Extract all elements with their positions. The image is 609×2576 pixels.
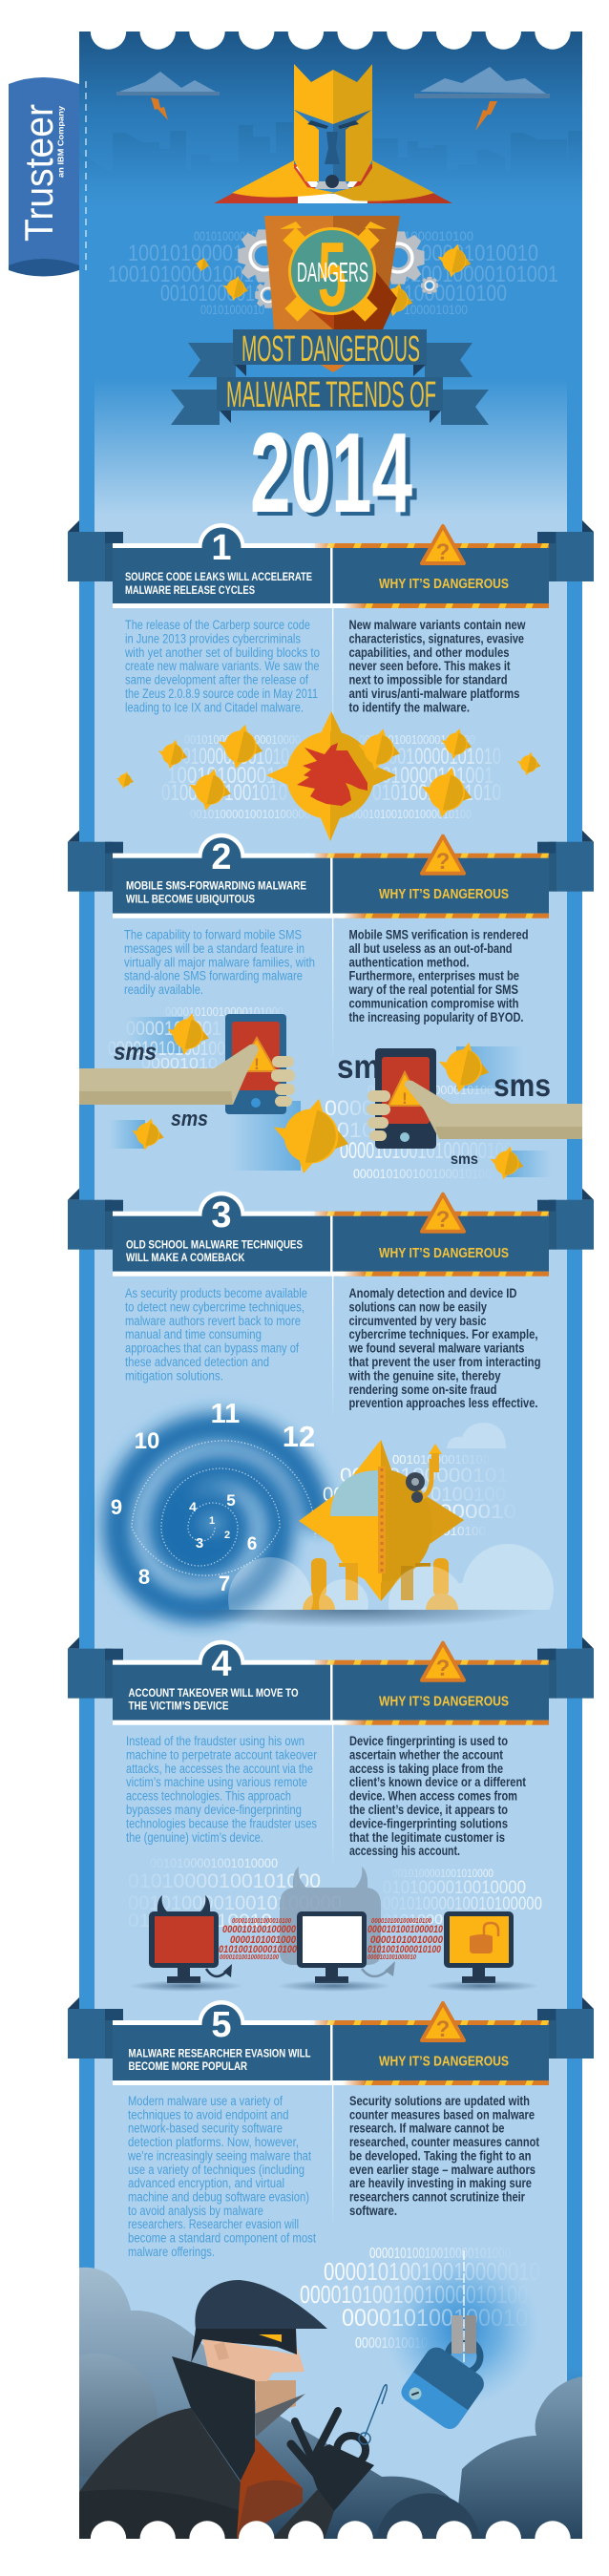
section 5 body right: Security solutions are updated with xyxy=(349,2094,530,2108)
section 3 body left: manual and time consuming xyxy=(125,1327,262,1341)
section 1 binary background: 0000101001001000010100 xyxy=(346,807,472,821)
storm clouds and lightning xyxy=(116,67,550,131)
red binary stream right: 0000101001000010 xyxy=(368,1924,444,1935)
hero binary text: 1000010100 xyxy=(404,281,507,306)
section 5 body left: we’re increasingly seeing malware that xyxy=(127,2148,311,2163)
section 5 why dangerous heading: WHY IT’S DANGEROUS xyxy=(379,2055,509,2070)
bottom perforated edge xyxy=(57,2521,609,2576)
section 2 binary background: 0000101001 xyxy=(126,1018,221,1040)
section 2 body left: stand-alone SMS forwarding malware xyxy=(124,969,303,983)
section 4 body left: machine to perpetrate account takeover xyxy=(126,1747,317,1762)
red binary stream right: 0000101001000010100 xyxy=(371,1918,431,1925)
section 4 body left xyxy=(126,1734,317,1845)
section 3 body left: approaches that can bypass many of xyxy=(125,1341,299,1356)
red binary stream left: 0000101001000010100 xyxy=(232,1918,291,1925)
section 2 body right: communication compromise with xyxy=(349,997,519,1010)
shield badge: 5 dangers: DANGERS xyxy=(297,258,368,288)
section 1 body left: the Zeus 2.0.8.9 source code in May 2011 xyxy=(125,686,318,701)
section 1 binary background: 00001010010000100100 xyxy=(359,732,475,747)
section 3 body right: cybercrime techniques. For example, xyxy=(349,1327,538,1341)
section 4 binary background: 00101000010010100000 xyxy=(383,1894,542,1914)
section 3 binary background xyxy=(323,1452,516,1538)
section 4 body left: attacks, he accesses the account via the xyxy=(126,1762,313,1776)
section 1 binary background: 00101000010010100000 xyxy=(190,807,310,821)
section 4 body left: technologies because the fraudster uses xyxy=(126,1816,317,1830)
title ribbons xyxy=(171,329,489,425)
section 5: researcher evasion xyxy=(33,1997,594,2539)
hero binary text: 100101000010010 xyxy=(108,262,264,287)
spiral clock: 9 xyxy=(111,1495,122,1519)
section 5 binary stream xyxy=(300,2246,540,2352)
spiral clock: 10 xyxy=(135,1428,159,1454)
shield badge: 5 dangers: 5 xyxy=(318,223,346,326)
section 3: old school malware xyxy=(68,1189,594,1642)
section 4 body right: device. When access comes from xyxy=(349,1789,517,1804)
section 5 body right: be developed. Taking the fight to an xyxy=(349,2148,531,2163)
section 1 body right: New malware variants contain new xyxy=(349,618,526,632)
monitor floor shadows xyxy=(129,1980,539,1992)
section 2 body right: Furthermore, enterprises must be xyxy=(349,969,519,983)
red binary stream left xyxy=(219,1918,298,1961)
section 5 body left xyxy=(127,2094,316,2259)
section 5 body left: machine and debug software evasion) xyxy=(128,2189,309,2204)
section 1 body left: in June 2013 provides cybercriminals xyxy=(125,631,301,645)
section 2 binary background: 00001010010000101000 xyxy=(165,1004,284,1019)
section 2 binary background: 0000101001000010100 xyxy=(368,1083,494,1097)
section 5 body right: research. If malware cannot be xyxy=(349,2122,505,2136)
gloved hand with lock pick xyxy=(291,2385,387,2511)
section 4 binary background: 0010100001001010000 xyxy=(150,1855,278,1870)
right phone with hand xyxy=(367,1048,582,1149)
section 3 ground shadow xyxy=(204,1610,521,1627)
section 5 binary stream: 00001010010010000010 xyxy=(324,2257,540,2286)
section 2 body left: virtually all major malware families, with xyxy=(124,955,315,969)
section 3 binary background: 00010100010100100 xyxy=(323,1484,506,1506)
section 1 body left: with yet another set of building blocks to xyxy=(124,645,320,660)
section 3 body left: malware authors revert back to more xyxy=(125,1314,301,1328)
hero binary text xyxy=(108,228,558,317)
red binary stream right: 0101001000010100 xyxy=(368,1944,442,1955)
section 1 horse malware emblem xyxy=(266,711,396,841)
spiral clock: 4 xyxy=(189,1499,197,1514)
spiral clock: 7 xyxy=(219,1572,230,1595)
monitor: victim white xyxy=(297,1911,395,1983)
spiral clock: 2 xyxy=(224,1530,230,1541)
section 3 binary background: 00010100000101 xyxy=(340,1465,509,1487)
section 3 heading: WILL MAKE A COMEBACK xyxy=(126,1253,245,1264)
red binary stream left: 0000101001000 xyxy=(230,1934,297,1946)
section 5 body right: researchers cannot scrutinize their xyxy=(349,2189,526,2204)
section 3 number: 3 xyxy=(211,1195,232,1235)
section 3 body right: rendering some on-site fraud xyxy=(349,1383,496,1397)
section 5 binary stream: 00001010010 xyxy=(355,2335,428,2352)
hero: golden masked figure xyxy=(214,64,452,203)
section 4 body right: Device fingerprinting is used to xyxy=(349,1734,508,1748)
section 1 binary background: 100101000010 xyxy=(167,763,286,789)
section 1 binary background: 0100001001010 xyxy=(182,744,289,770)
hero binary text: 0100001010010 xyxy=(400,241,538,266)
section 4 body left: access technologies. This approach xyxy=(126,1789,291,1804)
lock glow xyxy=(384,2250,540,2407)
section 5 binary stream: 000010100100010 xyxy=(342,2305,528,2332)
section 3 body right: with the genuine site, thereby xyxy=(348,1368,501,1383)
section 5 body right: even earlier stage – malware authors xyxy=(349,2163,536,2177)
section 1 heading: MALWARE RELEASE CYCLES xyxy=(125,585,255,597)
section 1 binary background xyxy=(161,732,501,821)
section 2 number: 2 xyxy=(211,837,232,877)
section 3 heading: OLD SCHOOL MALWARE TECHNIQUES xyxy=(126,1240,303,1252)
hero binary text: 1000010100 xyxy=(404,228,473,243)
monitor: infected red xyxy=(149,1895,232,1983)
spiral clock: 12 xyxy=(283,1420,315,1453)
section 1 heading: SOURCE CODE LEAKS WILL ACCELERATE xyxy=(125,572,312,583)
section 2 binary lower: 0000 xyxy=(325,1096,374,1120)
section 5 body left: become a standard component of most xyxy=(128,2230,316,2246)
section 3 body left: mitigation solutions. xyxy=(125,1368,223,1383)
section 3 heading xyxy=(126,1240,303,1264)
small cloud xyxy=(447,1423,506,1448)
section 5 body left: researchers. Researcher evasion will xyxy=(128,2217,299,2231)
red binary stream left: 000010100100000 xyxy=(222,1924,297,1935)
spiral clock: 5 xyxy=(226,1491,236,1510)
section 1 body left: create new malware variants. We saw the xyxy=(125,659,319,673)
title year 2014: 2014 xyxy=(250,410,412,537)
shield badge: 5 dangers xyxy=(264,216,400,329)
section 1 body right: anti virus/anti-malware platforms xyxy=(349,686,519,701)
section 2 heading: MOBILE SMS-FORWARDING MALWARE xyxy=(126,881,306,893)
section 1 heading xyxy=(125,572,312,597)
section 4 why dangerous heading: WHY IT’S DANGEROUS xyxy=(379,1695,509,1710)
section 3 body right xyxy=(348,1286,540,1410)
section 3 body right: circumvented by very basic xyxy=(349,1314,487,1328)
section 3 binary background: 000010 xyxy=(439,1501,516,1523)
section 3 body right: prevention approaches less effective. xyxy=(349,1396,538,1410)
section 2 binary lower: 0010 xyxy=(325,1118,374,1142)
section 3 body left xyxy=(125,1286,307,1383)
section 4 binary background: 0101000010010 xyxy=(128,1911,272,1932)
section 4 body left: victim’s machine using various remote xyxy=(126,1775,307,1789)
section 3 binary background: 00101000010100 xyxy=(392,1452,490,1467)
section 4 binary background: 01010000100101000 xyxy=(128,1870,321,1892)
title ribbons: MOST DANGEROUS xyxy=(242,329,420,370)
section 1: source code leaks xyxy=(68,520,594,841)
left phone with hand: ! xyxy=(254,1055,260,1073)
section 4 warning icon: ? xyxy=(436,1656,450,1681)
red binary stream right: 00001010010000 xyxy=(370,1934,444,1946)
section 2 body left: readily available. xyxy=(124,982,203,997)
section 4 body right: access is taking place from the xyxy=(349,1762,503,1776)
ghost devil behind middle monitor xyxy=(280,1867,381,1965)
section 4 body right xyxy=(349,1734,526,1858)
top perforated edge xyxy=(76,0,592,50)
sms labels left: sms xyxy=(171,1107,208,1130)
section 3 body left: to detect new cybercrime techniques, xyxy=(125,1299,304,1314)
section 1 body right: never seen before. This makes it xyxy=(349,659,511,673)
section 2 body right: Mobile SMS verification is rendered xyxy=(349,928,529,941)
red binary stream left: 0101001000010100 xyxy=(219,1944,298,1955)
hero binary text: 010010000101001 xyxy=(400,262,558,287)
section 3 body right: Anomaly detection and device ID xyxy=(349,1286,517,1300)
left phone with hand xyxy=(79,1014,295,1114)
logo tab: Trusteer: Trusteer xyxy=(16,104,61,242)
spiral clock: 11 xyxy=(211,1399,240,1429)
section 4 heading xyxy=(128,1688,299,1713)
section 5 binary stream: 00001010010010000101000 xyxy=(369,2246,511,2262)
section 5 binary stream: 0000101001001000010100 xyxy=(300,2280,528,2309)
title year 2014: 2014 xyxy=(255,413,417,540)
section 2 binary lower: 000010100100100010100 xyxy=(353,1166,492,1181)
section 4 heading: ACCOUNT TAKEOVER WILL MOVE TO xyxy=(128,1688,299,1700)
section 1 body right: characteristics, signatures, evasive xyxy=(349,631,524,645)
section 5 warning icon: ? xyxy=(436,2016,450,2042)
hero binary text: 1000010100 xyxy=(404,302,468,317)
section 5 body right: software. xyxy=(349,2204,397,2218)
section 5 number: 5 xyxy=(211,2005,232,2045)
section 4 body right: device-fingerprinting solutions xyxy=(349,1816,508,1830)
section 3 body right: that prevent the user from interacting xyxy=(349,1355,540,1369)
sms labels right: sms xyxy=(494,1067,551,1103)
section 3 why dangerous heading: WHY IT’S DANGEROUS xyxy=(379,1246,509,1261)
section 2 body right: all but useless as an out-of-band xyxy=(349,941,512,956)
section 4 number: 4 xyxy=(211,1644,232,1684)
gears and sparks xyxy=(196,229,471,316)
spiral clock xyxy=(111,1399,318,1609)
padlock being cut xyxy=(397,2250,489,2433)
section 1 number: 1 xyxy=(211,528,232,568)
section 1 body right: next to impossible for standard xyxy=(349,673,508,687)
section 4 binary background: 00101000010010100000 xyxy=(128,1892,342,1914)
spiral clock: 3 xyxy=(196,1535,203,1552)
section 3 body left: As security products become available xyxy=(125,1286,307,1300)
red binary stream left: 0000101001000010100 xyxy=(220,1954,279,1961)
section 4 body right: the client’s device, it appears to xyxy=(349,1803,508,1817)
hero binary text: 00101000010 xyxy=(160,281,264,306)
section 4 body right: accessing his account. xyxy=(349,1844,460,1858)
section 2 binary background: 00001010 xyxy=(141,1056,218,1072)
masked burglar figure xyxy=(79,2280,334,2539)
section 2 body right: the increasing popularity of BYOD. xyxy=(349,1010,523,1024)
section 1 body left: same development after the release of xyxy=(125,673,308,687)
red binary stream right xyxy=(368,1918,444,1961)
section 3 warning icon: ? xyxy=(436,1207,450,1233)
section 5 body right: are heavily investing in making sure xyxy=(349,2176,532,2190)
section 2 binary background: 00001010100100 xyxy=(108,1038,225,1060)
section 1 warning icon: ? xyxy=(436,539,450,565)
section 4 body left: the (genuine) victim’s device. xyxy=(126,1830,263,1845)
section 1 binary background: 01010010001010 xyxy=(372,780,501,806)
section 5 heading: MALWARE RESEARCHER EVASION WILL xyxy=(128,2049,311,2060)
section 4: account takeover xyxy=(68,1637,594,1992)
background storm clouds xyxy=(33,2268,582,2539)
section 5 body right xyxy=(349,2094,539,2218)
section 4 body right: client’s known device or a different xyxy=(349,1775,526,1789)
hero binary text: 1001010000100 xyxy=(128,241,264,266)
section 5 body right: researched, counter measures cannot xyxy=(349,2135,539,2149)
section 2 body left: messages will be a standard feature in xyxy=(124,941,304,956)
section 3 binary background: 010100 xyxy=(443,1524,486,1538)
section 4 binary background: 0101000010010000 xyxy=(383,1878,526,1898)
section 2 binary lower: 00001010010100000100 xyxy=(340,1138,513,1164)
section 4 body left: bypasses many device-fingerprinting xyxy=(126,1803,302,1817)
section 2 why dangerous heading: WHY IT’S DANGEROUS xyxy=(379,887,509,902)
section 1 binary background: 01001001001010 xyxy=(161,780,287,806)
section 2 warning icon: ? xyxy=(436,849,450,875)
section 1 body right xyxy=(349,618,526,714)
section 4 heading: THE VICTIM’S DEVICE xyxy=(128,1701,229,1713)
section 4 body left: Instead of the fraudster using his own xyxy=(126,1734,304,1748)
section 1 binary background: 0010000101001 xyxy=(372,763,494,789)
section 3 body right: solutions can now be easily xyxy=(349,1299,487,1314)
section 5 body left: detection platforms. Now, however, xyxy=(128,2135,299,2149)
section 1 why dangerous heading: WHY IT’S DANGEROUS xyxy=(379,577,509,592)
title year 2014 xyxy=(250,410,417,540)
rocket xyxy=(299,1440,464,1610)
clouds at rocket base xyxy=(228,1544,554,1610)
section 5 body left: use a variety of techniques (including xyxy=(128,2163,304,2177)
section 1 body left: The release of the Carberp source code xyxy=(125,618,310,632)
hero binary text: 00101000010 xyxy=(194,228,257,243)
city skyline xyxy=(79,122,582,186)
spiral clock: 6 xyxy=(247,1534,257,1554)
section 1 body left: leading to Ice IX and Citadel malware. xyxy=(125,700,304,714)
hero binary text: 00101000010 xyxy=(200,302,264,317)
section 5 body left: to avoid analysis by malware xyxy=(128,2204,263,2218)
section 4 body right: that the legitimate customer is xyxy=(349,1830,505,1845)
section 5 body left: techniques to avoid endpoint and xyxy=(128,2107,288,2122)
section 2 body right: wary of the real potential for SMS xyxy=(348,982,518,997)
section 5 heading xyxy=(128,2049,311,2073)
section 4 binary background xyxy=(128,1855,542,1932)
section 2 virus sparks xyxy=(132,1013,523,1179)
red binary stream right: 0000101001000010 xyxy=(368,1954,416,1961)
sms labels right: sms xyxy=(337,1048,397,1086)
section 1 virus sparks xyxy=(116,725,540,817)
section 5 body left: network-based security software xyxy=(128,2122,283,2136)
section 2: mobile sms forwarding xyxy=(68,831,594,1181)
section 3 body right: we found several malware variants xyxy=(348,1341,525,1356)
section 2 binary background xyxy=(108,1004,494,1097)
sms labels left: sms xyxy=(114,1039,157,1066)
section 1 binary background: 00101000010100010000 xyxy=(184,732,301,747)
spiral clock: 8 xyxy=(138,1565,150,1589)
logo tab: Trusteer: an IBM Company xyxy=(57,105,65,178)
section 5 heading: BECOME MORE POPULAR xyxy=(128,2061,248,2073)
section 2 body right: authentication method. xyxy=(349,955,470,969)
logo tab: Trusteer xyxy=(9,77,86,277)
section 5 body right: counter measures based on malware xyxy=(349,2107,535,2122)
section 1 binary background: 0010000101010 xyxy=(388,744,501,770)
sms labels right xyxy=(337,1048,551,1168)
section 3 body left: these advanced detection and xyxy=(125,1355,269,1369)
section 4 binary background: 0101000 xyxy=(383,1911,443,1928)
monitor: open lock yellow xyxy=(444,1911,514,1983)
section 2 binary lower xyxy=(325,1096,513,1181)
section 1 body left xyxy=(124,618,320,714)
section 4 body right: ascertain whether the account xyxy=(349,1747,503,1762)
spiral clock: 1 xyxy=(209,1515,215,1527)
sms labels right: sms xyxy=(451,1151,478,1168)
section 5 body left: advanced encryption, and virtual xyxy=(128,2176,284,2190)
section 2 heading: WILL BECOME UBIQUITOUS xyxy=(126,894,255,905)
right phone with hand: ! xyxy=(402,1089,408,1108)
section 5 body left: Modern malware use a variety of xyxy=(128,2094,283,2108)
section 5 body left: malware offerings. xyxy=(128,2245,215,2259)
section 4 binary background: 0010100001001010000 xyxy=(392,1867,494,1880)
section 1 body right: capabilities, and other modules xyxy=(349,645,510,660)
section 2 body right xyxy=(348,928,529,1024)
section 2 motion trails xyxy=(109,1017,552,1177)
section 2 body left: The capability to forward mobile SMS xyxy=(124,928,302,941)
sms labels left xyxy=(114,1039,208,1130)
section 2 body left xyxy=(124,928,315,997)
section 1 body right: to identify the malware. xyxy=(349,700,470,714)
section 2 heading xyxy=(126,881,306,905)
